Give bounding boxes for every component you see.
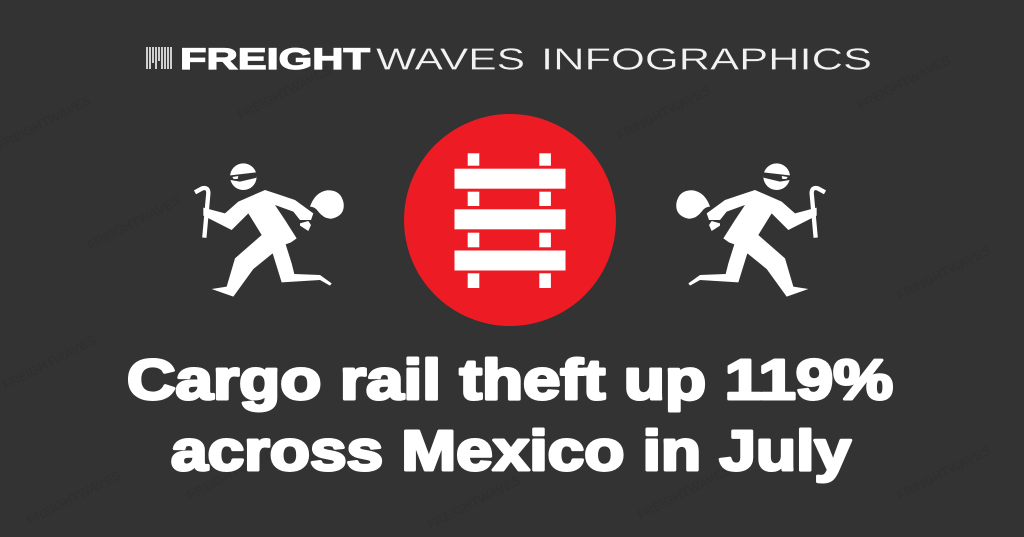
logo word: WAVES: WAVES xyxy=(376,42,525,76)
watermark pattern: FREIGHTWAVES xyxy=(425,472,523,533)
header logo xyxy=(146,42,872,76)
watermark pattern: FREIGHTWAVES xyxy=(895,442,993,503)
watermark pattern: FREIGHTWAVES xyxy=(615,82,713,143)
icon: right thief with crowbar and sack xyxy=(676,163,825,297)
watermark pattern: FREIGHTWAVES xyxy=(0,332,98,393)
watermark pattern: FREIGHTWAVES xyxy=(25,467,123,528)
watermark pattern: FREIGHTWAVES xyxy=(235,62,333,123)
railroad track xyxy=(454,153,566,288)
watermark pattern: FREIGHTWAVES xyxy=(635,462,733,523)
icon: left thief with crowbar and sack xyxy=(195,163,344,297)
logo word: INFOGRAPHICS: INFOGRAPHICS xyxy=(541,42,872,76)
headline line 1: Cargo rail theft up 119% xyxy=(127,348,893,412)
headline xyxy=(127,348,893,483)
icon: FreightWaves logo bars xyxy=(146,47,172,69)
watermark pattern: FREIGHTWAVES xyxy=(85,192,183,253)
icon: red circle with railroad track xyxy=(404,114,616,326)
watermark pattern: FREIGHTWAVES xyxy=(185,442,283,503)
logo word: FREIGHT: FREIGHT xyxy=(180,43,370,76)
watermark pattern: FREIGHTWAVES xyxy=(895,242,993,303)
headline line 2: across Mexico in July xyxy=(171,419,851,483)
watermark pattern: FREIGHTWAVES xyxy=(855,52,953,113)
